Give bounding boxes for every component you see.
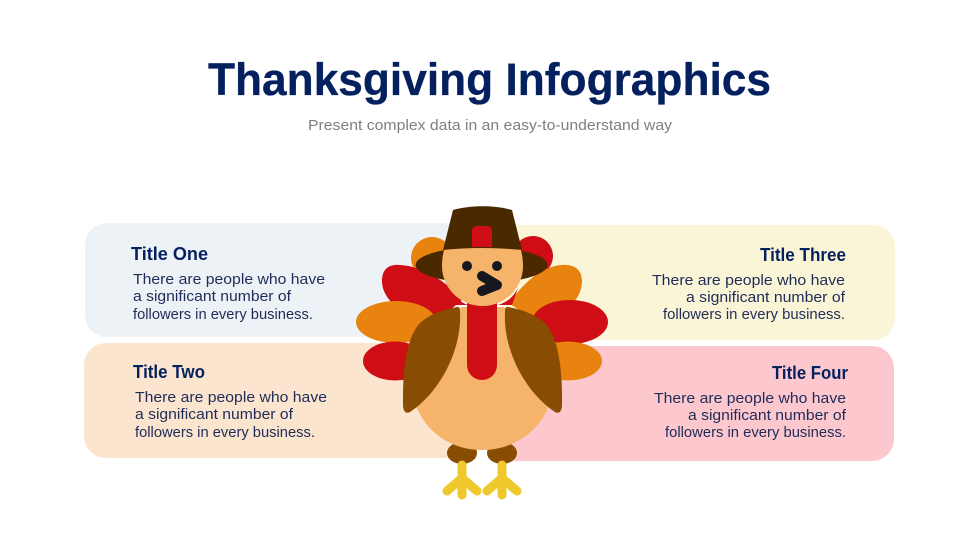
text block: title two body: a significant number of xyxy=(135,407,294,423)
text block: title three body: a significant number of xyxy=(686,290,846,306)
text block: title one body: a significant number of xyxy=(133,289,292,305)
text block: title two body xyxy=(135,390,327,441)
turkey legs xyxy=(447,442,517,464)
turkey hat crown xyxy=(443,206,522,250)
panel: title four xyxy=(502,346,894,461)
text block: title one body xyxy=(133,272,325,323)
heading: title one: Title One xyxy=(131,244,208,264)
turkey eyes xyxy=(462,261,502,271)
text block: title one body: followers in every business. xyxy=(133,307,313,323)
turkey right wing xyxy=(505,307,562,413)
icon: turkey xyxy=(356,206,608,495)
panel: title three xyxy=(502,225,895,340)
heading: title four: Title Four xyxy=(772,363,848,383)
turkey beak xyxy=(482,276,497,291)
panel: title one xyxy=(85,223,462,337)
text block: title three body xyxy=(652,273,846,323)
title: Thanksgiving Infographics xyxy=(208,54,771,105)
turkey wattle xyxy=(467,300,497,380)
turkey hat band xyxy=(472,226,492,247)
turkey head xyxy=(442,247,523,306)
subtitle: Present complex data in an easy-to-understand way xyxy=(308,117,673,134)
text block: title one body: There are people who have xyxy=(133,272,325,288)
turkey feet xyxy=(447,465,517,495)
text block: title four body: There are people who have xyxy=(654,391,846,407)
text block: title four body xyxy=(654,391,847,441)
text block: title three body: There are people who have xyxy=(652,273,845,289)
text block: title two body: followers in every business. xyxy=(135,425,315,441)
panel: title two xyxy=(84,343,462,458)
text block: title four body: a significant number of xyxy=(688,408,847,424)
turkey body xyxy=(411,307,554,450)
turkey tail feathers xyxy=(356,236,608,380)
heading: title two: Title Two xyxy=(133,362,205,382)
text block: title two body: There are people who have xyxy=(135,390,327,406)
turkey collar xyxy=(450,288,518,307)
text block: title four body: followers in every business. xyxy=(665,425,846,441)
turkey left wing xyxy=(403,307,460,413)
text block: title three body: followers in every business. xyxy=(663,307,845,323)
turkey hat brim xyxy=(416,247,548,283)
heading: title three: Title Three xyxy=(760,245,846,265)
